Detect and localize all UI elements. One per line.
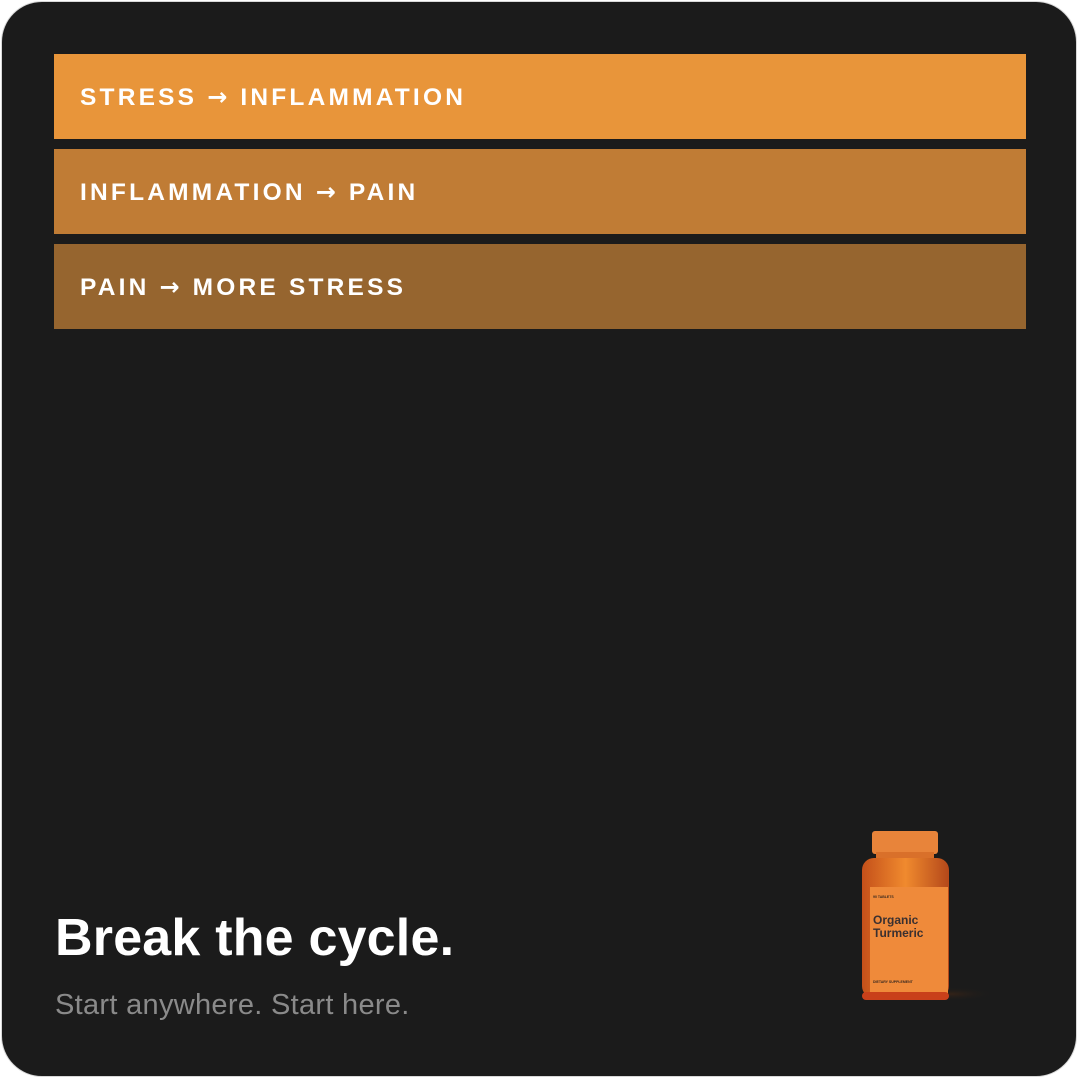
icon: turmeric bottle <box>862 831 969 1000</box>
bar: stress to inflammation: STRESS → INFLAMMATION <box>80 83 466 111</box>
bar: pain to more stress <box>54 244 1026 329</box>
icon: turmeric bottle: DIETARY SUPPLEMENT <box>873 980 914 984</box>
headline: Break the cycle. <box>55 909 454 967</box>
icon: turmeric bottle: 90 TABLETS <box>873 895 894 899</box>
bar: stress to inflammation <box>54 54 1026 139</box>
bar: inflammation to pain <box>54 149 1026 234</box>
bar: inflammation to pain: INFLAMMATION → PAIN <box>80 178 418 206</box>
subheadline: Start anywhere. Start here. <box>55 989 410 1021</box>
icon: turmeric bottle: Turmeric <box>873 926 924 940</box>
icon: turmeric bottle: Organic <box>873 913 919 927</box>
bar: pain to more stress: PAIN → MORE STRESS <box>80 273 406 301</box>
